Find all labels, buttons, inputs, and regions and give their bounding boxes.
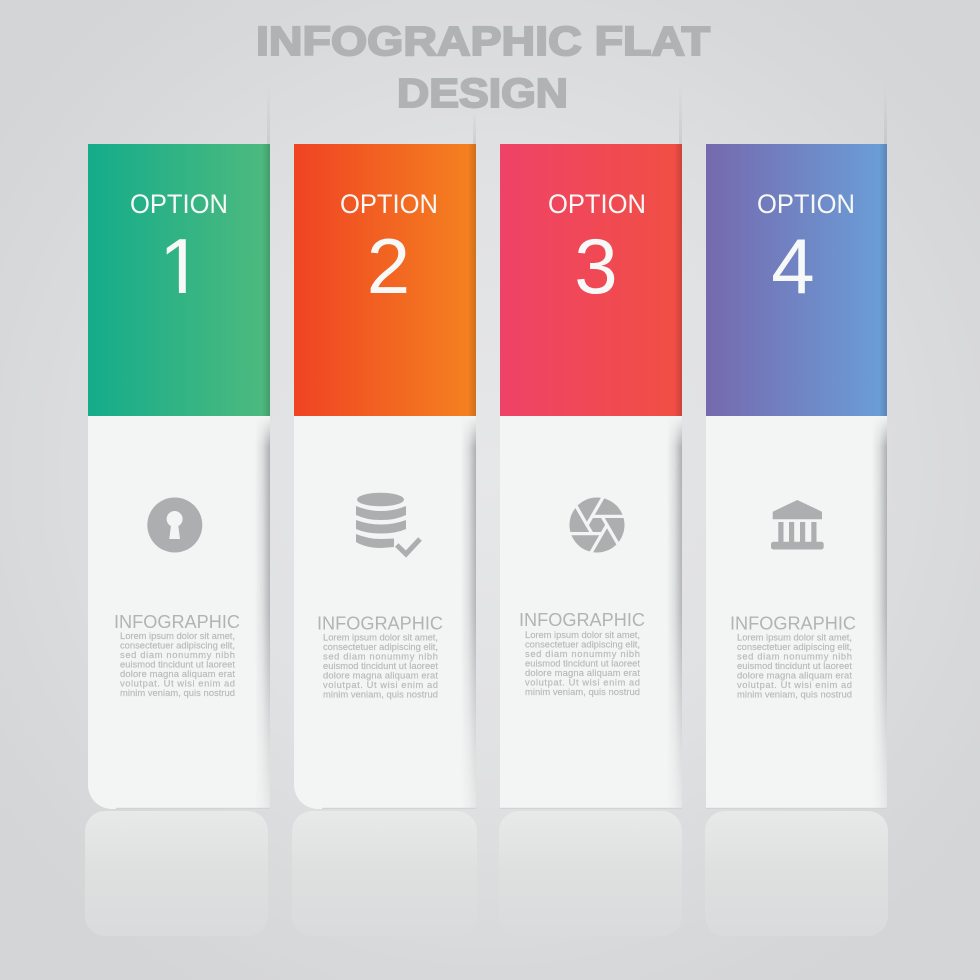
text block 4: consectetuer adipiscing elit,	[737, 641, 852, 652]
panel: option 2	[294, 110, 476, 809]
icon: aperture	[562, 490, 632, 560]
text block 1: sed diam nonummy nibh	[120, 649, 235, 660]
panel: option 3	[500, 85, 682, 809]
text block 1: Lorem ipsum dolor sit amet,	[120, 630, 235, 641]
option label 3: OPTION	[548, 189, 646, 219]
text block 2: minim veniam, quis nostrud	[323, 688, 438, 699]
text block 3: Lorem ipsum dolor sit amet,	[525, 629, 640, 640]
text block 1: INFOGRAPHIC	[114, 612, 240, 632]
text block 2: Lorem ipsum dolor sit amet,	[323, 631, 438, 642]
text block 2: dolore magna aliquam erat	[323, 669, 438, 680]
text block 4: euismod tincidunt ut laoreet	[737, 660, 852, 671]
text block 2: volutpat. Ut wisi enim ad	[323, 679, 438, 690]
number 3: 3	[574, 222, 618, 310]
text block 4: dolore magna aliquam erat	[737, 670, 852, 680]
white card 3	[500, 416, 682, 809]
text block 3: euismod tincidunt ut laoreet	[525, 658, 640, 668]
text block 4: volutpat. Ut wisi enim ad	[737, 679, 852, 690]
number 1: 1	[159, 222, 203, 310]
title	[256, 18, 710, 116]
text block 2	[317, 614, 443, 699]
text block 3: INFOGRAPHIC	[519, 610, 645, 630]
text block 1	[114, 612, 240, 698]
icon: bank	[771, 500, 824, 550]
text block 3: volutpat. Ut wisi enim ad	[525, 676, 640, 688]
text block 2: sed diam nonummy nibh	[323, 650, 438, 661]
white card 4	[706, 416, 887, 809]
text block 1: volutpat. Ut wisi enim ad	[120, 678, 235, 688]
icon: database check	[356, 493, 420, 554]
edge shadow 3	[500, 85, 682, 809]
edge shadow 4	[706, 85, 887, 809]
text block 2: euismod tincidunt ut laoreet	[323, 660, 438, 671]
text block 3	[519, 610, 645, 697]
white card 1	[88, 416, 270, 809]
text block 4: minim veniam, quis nostrud	[737, 688, 852, 700]
edge shadow 1	[116, 85, 270, 809]
text block 4: sed diam nonummy nibh	[737, 650, 852, 662]
text block 4: INFOGRAPHIC	[730, 614, 856, 634]
text block 3: minim veniam, quis nostrud	[525, 686, 640, 697]
text block 3: dolore magna aliquam erat	[525, 667, 640, 678]
text block 1: consectetuer adipiscing elit,	[120, 640, 235, 650]
text block 1: minim veniam, quis nostrud	[120, 687, 235, 698]
option label 4: OPTION	[757, 189, 855, 219]
text block 2: consectetuer adipiscing elit,	[323, 641, 438, 652]
text block 4	[730, 614, 856, 700]
colour header 4	[706, 144, 887, 416]
title: INFOGRAPHIC FLAT	[256, 18, 710, 64]
text block 2: INFOGRAPHIC	[317, 614, 443, 634]
colour header 1	[88, 144, 270, 416]
text block 3: sed diam nonummy nibh	[525, 648, 640, 659]
panel: option 1	[88, 85, 270, 809]
number 4: 4	[771, 222, 815, 310]
option label 1: OPTION	[130, 189, 228, 219]
icon: keyhole	[147, 498, 202, 552]
text block 4: Lorem ipsum dolor sit amet,	[737, 632, 852, 642]
white card 2	[294, 416, 476, 809]
edge shadow 2	[322, 110, 476, 809]
colour header 2	[294, 144, 476, 416]
title: DESIGN	[397, 70, 568, 116]
text block 1: dolore magna aliquam erat	[120, 668, 235, 679]
text block 1: euismod tincidunt ut laoreet	[120, 658, 235, 670]
text block 3: consectetuer adipiscing elit,	[525, 638, 640, 650]
number 2: 2	[367, 222, 410, 310]
colour header 3	[500, 144, 682, 416]
reflections under the panels	[85, 811, 888, 936]
panel: option 4	[706, 85, 887, 809]
option label 2: OPTION	[340, 189, 438, 219]
